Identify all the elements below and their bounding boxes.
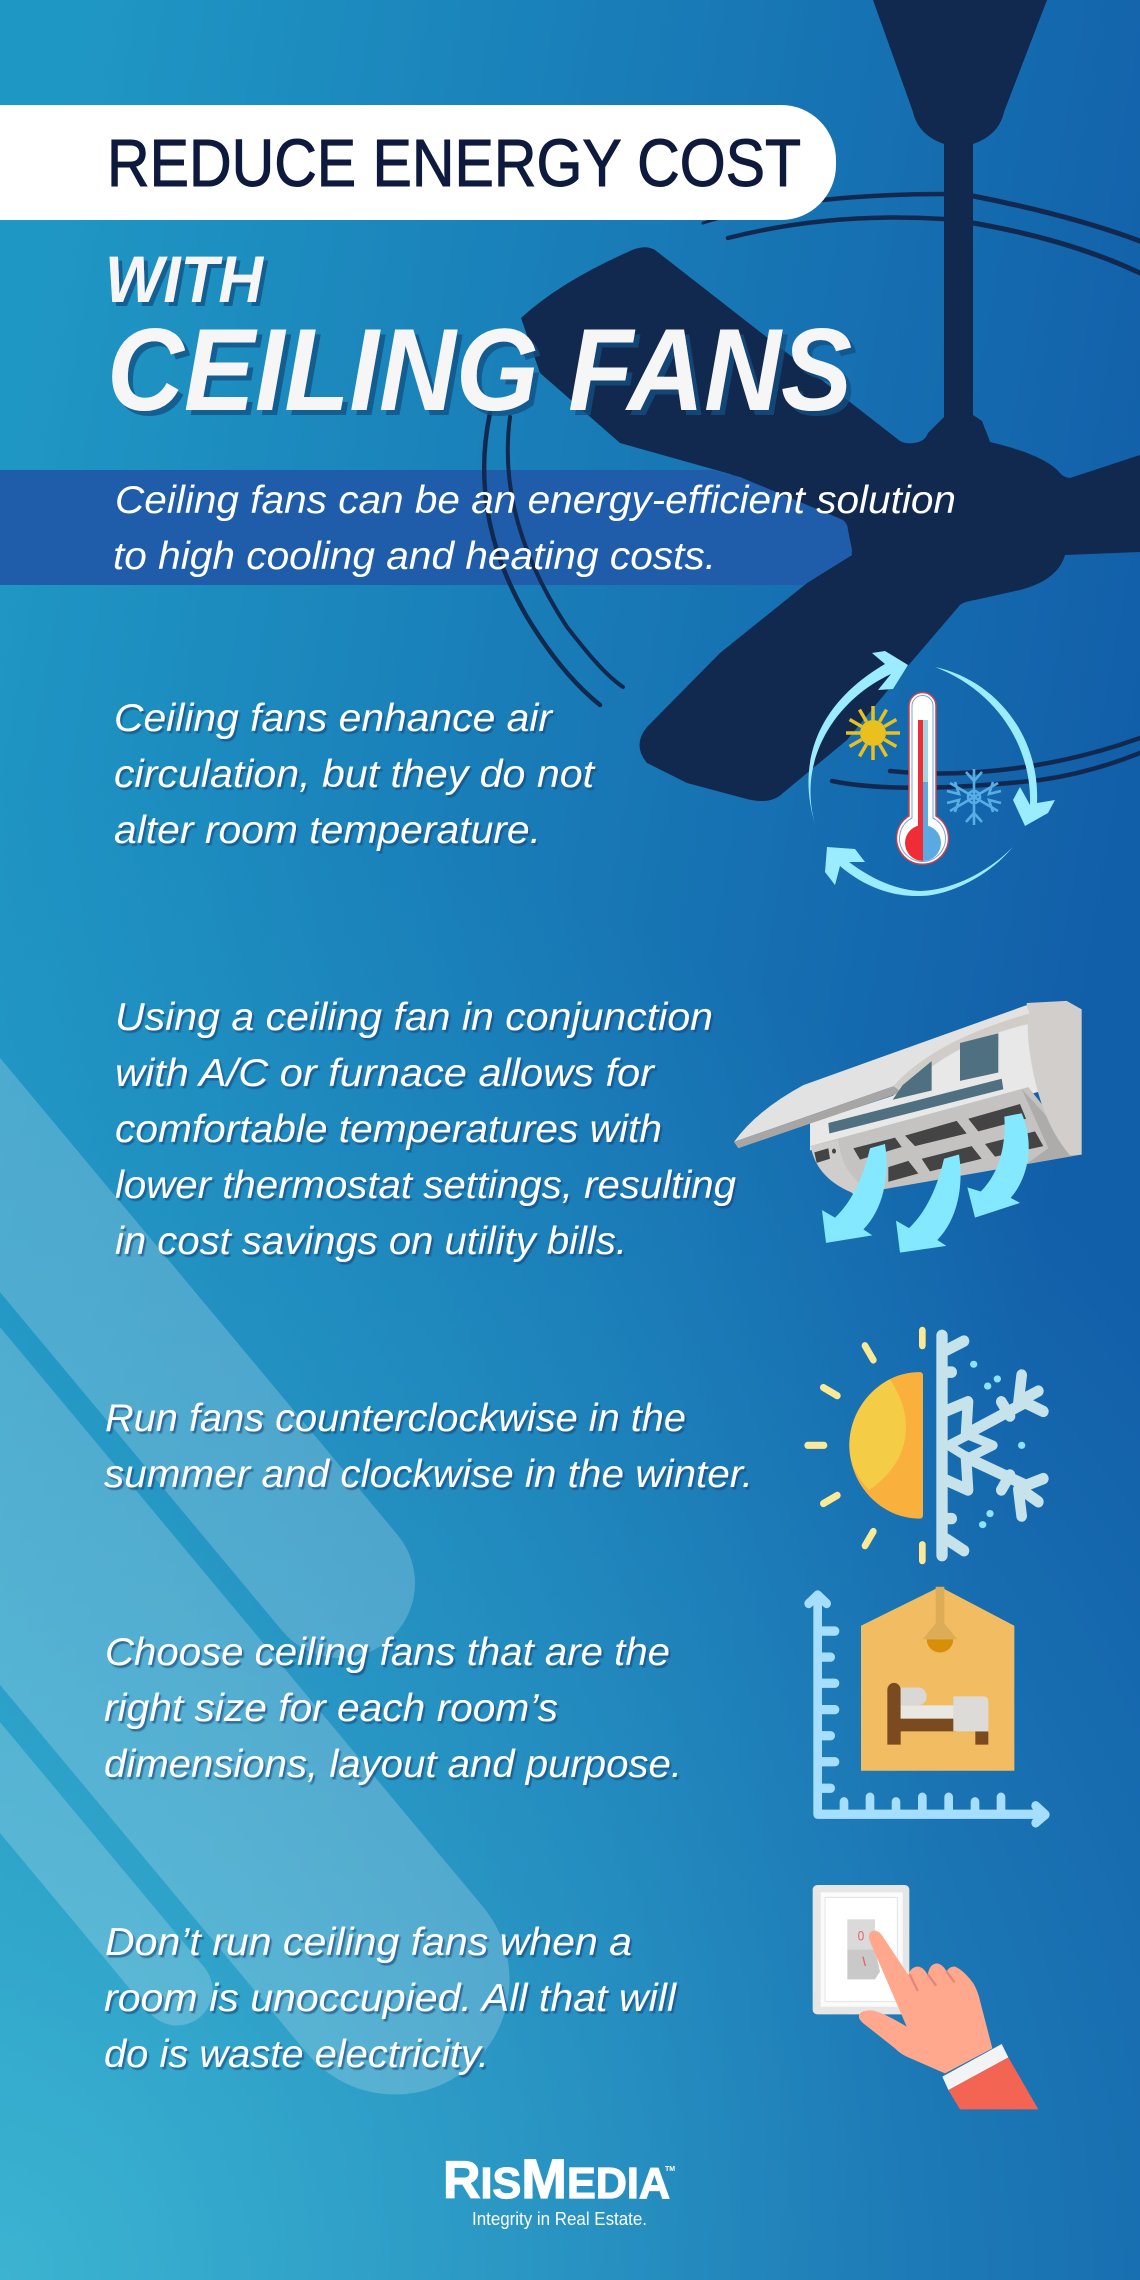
icon: thermometer cycle bbox=[808, 651, 1055, 896]
text: fan direction bbox=[104, 1397, 753, 1496]
intro text: to high cooling and heating costs. bbox=[113, 535, 716, 578]
icon: air conditioner bbox=[734, 1001, 1082, 1253]
logo: rismedia: Integrity in Real Estate. bbox=[472, 2209, 647, 2229]
text: A/C or furnace: comfortable temperatures with bbox=[115, 1108, 662, 1151]
icon: hand on light switch: 0 bbox=[858, 1927, 865, 1943]
title: ceiling fans: CEILING FANS bbox=[107, 304, 852, 435]
text: fan size: dimensions, layout and purpose. bbox=[104, 1743, 682, 1786]
text: unoccupied room: room is unoccupied. All that will bbox=[104, 1977, 677, 2020]
fan motion lines bbox=[484, 194, 1140, 788]
text: fan size bbox=[104, 1631, 682, 1786]
icon: snowflake bbox=[947, 769, 1001, 825]
text: air circulation bbox=[114, 697, 596, 852]
text: unoccupied room bbox=[104, 1921, 677, 2076]
title: with: WITH bbox=[105, 242, 264, 316]
text: A/C or furnace: with A/C or furnace allows for bbox=[115, 1052, 656, 1095]
icon: room size bbox=[809, 1587, 1045, 1823]
logo: rismedia: TM bbox=[665, 2166, 675, 2173]
arrow: bottom bbox=[825, 847, 1013, 896]
text: air circulation: Ceiling fans enhance air bbox=[114, 697, 554, 740]
text: unoccupied room: Don’t run ceiling fans when a bbox=[105, 1921, 632, 1964]
icon: sun bbox=[846, 706, 900, 760]
title pill bbox=[0, 105, 836, 220]
intro band bbox=[0, 470, 852, 585]
intro text: Ceiling fans can be an energy-efficient solution bbox=[115, 479, 956, 522]
text: A/C or furnace: lower thermostat settings, resulting bbox=[115, 1164, 736, 1207]
arrow: right bbox=[935, 667, 1055, 826]
text: air circulation: alter room temperature. bbox=[114, 809, 541, 852]
logo: rismedia: RISMEDIA bbox=[443, 2147, 670, 2210]
arrow: air flow bbox=[822, 1113, 1029, 1253]
text: fan size: right size for each room’s bbox=[104, 1687, 558, 1730]
text: unoccupied room: do is waste electricity. bbox=[104, 2033, 489, 2076]
ceiling fan silhouette bbox=[521, 0, 1140, 801]
text: A/C or furnace: in cost savings on utility bills. bbox=[115, 1220, 627, 1263]
icon: hand on light switch bbox=[813, 1885, 1038, 2109]
text: A/C or furnace: Using a ceiling fan in conjunction bbox=[115, 996, 713, 1039]
icon: sun and snowflake bbox=[808, 1330, 1043, 1561]
text: air circulation: circulation, but they do not bbox=[114, 753, 596, 796]
text: fan direction: Run fans counterclockwise in the bbox=[105, 1397, 686, 1440]
text: A/C or furnace bbox=[115, 996, 736, 1263]
text: fan size: Choose ceiling fans that are the bbox=[105, 1631, 670, 1674]
thermometer bbox=[896, 692, 949, 864]
title: reduce energy cost: REDUCE ENERGY COST bbox=[107, 126, 801, 201]
decorative diagonal pills bbox=[0, 935, 395, 1990]
intro text bbox=[113, 479, 956, 578]
text: fan direction: summer and clockwise in the winter. bbox=[104, 1453, 753, 1496]
arrow: top left bbox=[808, 651, 908, 824]
